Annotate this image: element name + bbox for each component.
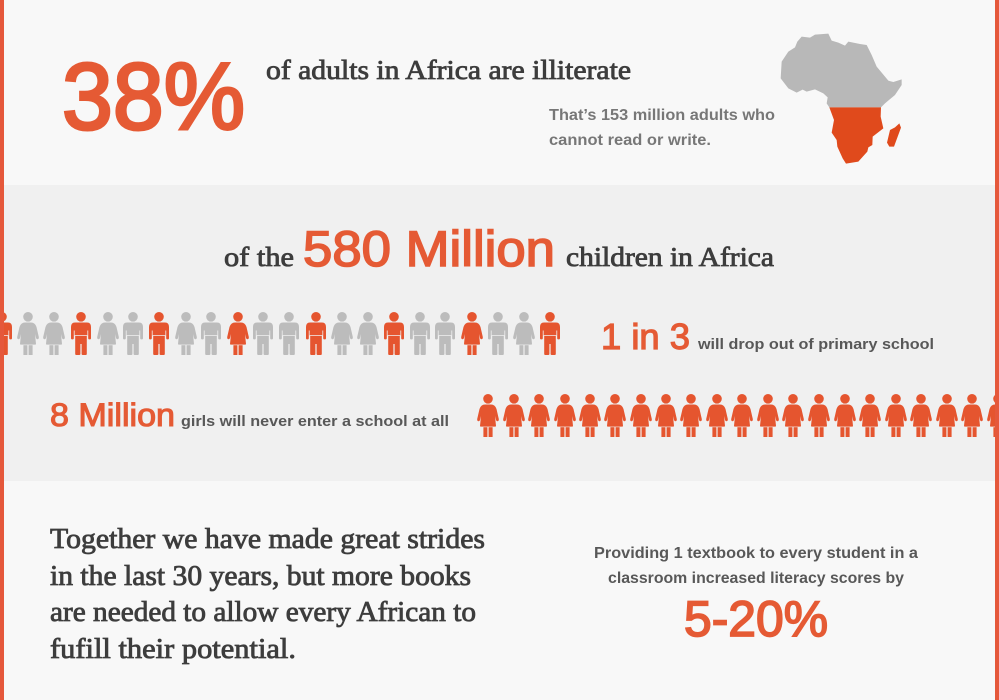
- heading: 580 million children: of the: [224, 242, 294, 272]
- big stat: 5-20%: 5-20%: [684, 591, 828, 647]
- text block: 153 million adults: cannot read or write.: [549, 132, 711, 149]
- heading: adults illiterate: of adults in Africa are illiterate: [266, 55, 631, 85]
- panel: children band: [0, 185, 999, 481]
- left accent bar: [0, 0, 4, 700]
- text block: great strides: in the last 30 years, but more books: [50, 561, 471, 592]
- stat: 1 in 3 drop out: [601, 316, 934, 357]
- stat: 1 in 3 drop out: 1 in 3: [601, 316, 690, 357]
- text block: textbook: [594, 545, 918, 587]
- text block: textbook: Providing 1 textbook to every student in a: [594, 545, 918, 562]
- text block: great strides: Together we have made great strides: [50, 524, 485, 555]
- text block: great strides: fufill their potential.: [50, 634, 296, 665]
- stat: 8 million girls: girls will never enter a school at all: [181, 413, 449, 430]
- icon: map of Africa: [781, 34, 902, 164]
- pictogram row: 1 in 3 children: [0, 312, 560, 355]
- stat: 8 million girls: [50, 397, 449, 433]
- right accent bar: [995, 0, 999, 700]
- heading: 580 million children: 580 Million: [303, 221, 555, 277]
- text block: textbook: classroom increased literacy scores by: [608, 570, 904, 587]
- text block: great strides: [50, 524, 485, 665]
- heading: 580 million children: children in Africa: [566, 242, 774, 272]
- big stat: 38%: 38%: [62, 44, 245, 150]
- stat: 1 in 3 drop out: will drop out of primary school: [697, 336, 934, 353]
- text block: great strides: are needed to allow every African to: [50, 597, 476, 628]
- stat: 8 million girls: 8 Million: [50, 397, 175, 433]
- heading: 580 million children: [224, 221, 774, 277]
- text block: 153 million adults: That’s 153 million adults who: [549, 107, 775, 124]
- text block: 153 million adults: [549, 107, 775, 149]
- pictogram row: 8 million girls: [477, 394, 999, 437]
